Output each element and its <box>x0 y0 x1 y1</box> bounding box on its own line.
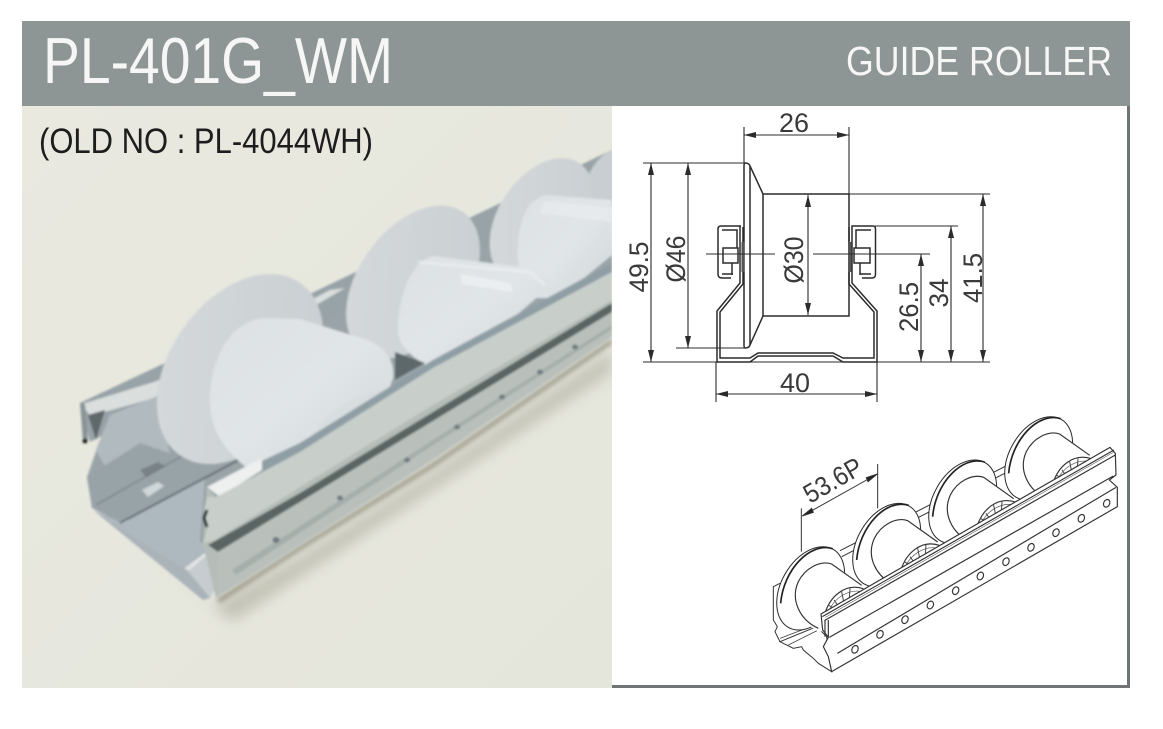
back rail edge <box>773 433 1070 642</box>
pitch dimension <box>798 452 878 552</box>
subtitle: GUIDE ROLLER <box>846 38 1112 84</box>
roller 1 <box>156 274 394 468</box>
mounting holes <box>851 498 1111 654</box>
front rail <box>203 263 612 598</box>
roller 4 (far) <box>588 150 612 205</box>
dimension lines <box>651 135 983 394</box>
roller 2 <box>345 205 536 366</box>
dimension labels: Ø46 <box>661 236 691 282</box>
photo label: (OLD NO : PL-4044WH) <box>39 122 373 161</box>
dimension labels: 49.5 <box>624 242 654 292</box>
rail holes <box>272 344 578 543</box>
rail floor <box>86 248 612 601</box>
panel: technical drawings <box>612 106 1128 686</box>
extension lines <box>643 127 990 402</box>
dimension labels: 41.5 <box>958 253 988 303</box>
back rail <box>80 150 612 444</box>
roller profile <box>744 163 849 348</box>
panel border <box>612 106 1128 686</box>
dimension labels: 26 <box>779 108 809 138</box>
dimension labels: 40 <box>780 368 810 398</box>
rail profile <box>717 226 877 362</box>
panel: product photo <box>22 106 650 688</box>
dimension labels: 34 <box>924 278 954 308</box>
front rail <box>821 447 1117 672</box>
dimension labels: 26.5 <box>894 282 924 332</box>
photo shadow under rail <box>212 338 612 624</box>
front dimension drawing <box>624 108 990 402</box>
dimension labels <box>624 108 988 398</box>
isometric drawing <box>763 405 1117 672</box>
title: PL-401G_WM <box>43 24 393 97</box>
dimension labels: Ø30 <box>779 236 809 284</box>
dark gap 1 <box>395 352 425 380</box>
roller 3 <box>488 158 612 300</box>
floor of rail <box>780 627 832 672</box>
rollers <box>763 405 1095 642</box>
header bar <box>22 21 1130 106</box>
pitch dimension: 53.6P <box>798 452 868 509</box>
